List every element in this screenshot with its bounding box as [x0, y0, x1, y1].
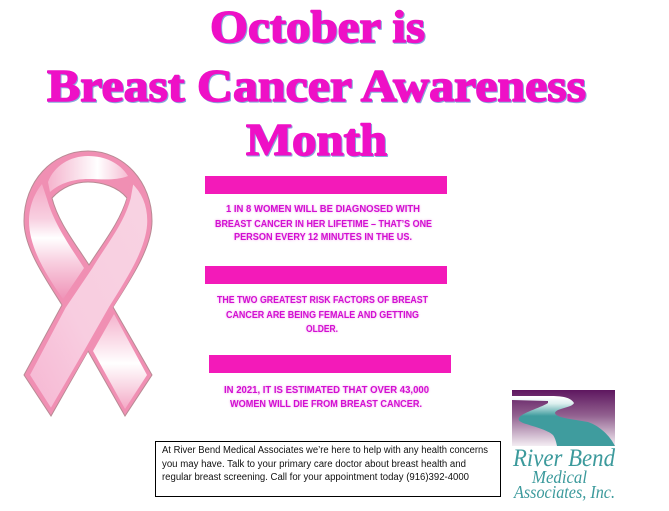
fact text 3 — [224, 384, 429, 410]
fact text 2: CANCER ARE BEING FEMALE AND GETTING — [226, 309, 419, 321]
fact text 3: IN 2021, IT IS ESTIMATED THAT OVER 43,000 — [224, 384, 429, 396]
fact text 2 — [217, 294, 428, 335]
icon: pink awareness ribbon — [24, 151, 152, 416]
logo: River Bend Medical Associates: River Bend — [512, 445, 615, 472]
fact bar 3 — [209, 355, 451, 373]
fact bar 1 — [205, 176, 447, 194]
fact text 1: PERSON EVERY 12 MINUTES IN THE US. — [234, 231, 412, 243]
fact text 1 — [215, 203, 432, 243]
callout: appointment information: you may have. Talk to your primary care doctor about breast health and — [162, 459, 466, 470]
callout: appointment information: At River Bend Medical Associates we’re here to help with any health concerns — [162, 445, 488, 456]
fact text 2: THE TWO GREATEST RISK FACTORS OF BREAST — [217, 294, 428, 306]
fact text 2: OLDER. — [306, 323, 338, 335]
fact text 1: 1 IN 8 WOMEN WILL BE DIAGNOSED WITH — [226, 203, 420, 215]
logo: River Bend Medical Associates: Medical — [531, 467, 587, 487]
logo: River Bend Medical Associates — [512, 390, 615, 502]
fact bar 2 — [205, 266, 447, 284]
callout: appointment information: regular breast screening. Call for your appointment today (916)392-4000 — [162, 472, 469, 483]
fact text 3: WOMEN WILL DIE FROM BREAST CANCER. — [230, 398, 422, 410]
fact text 1: BREAST CANCER IN HER LIFETIME – THAT’S ONE — [215, 218, 432, 230]
callout: appointment information — [156, 442, 500, 496]
title — [47, 2, 586, 165]
title: Breast Cancer Awareness — [47, 61, 586, 111]
title: Month — [246, 115, 387, 165]
logo: River Bend Medical Associates: Associates, Inc. — [513, 482, 615, 502]
title: October is — [210, 2, 425, 52]
